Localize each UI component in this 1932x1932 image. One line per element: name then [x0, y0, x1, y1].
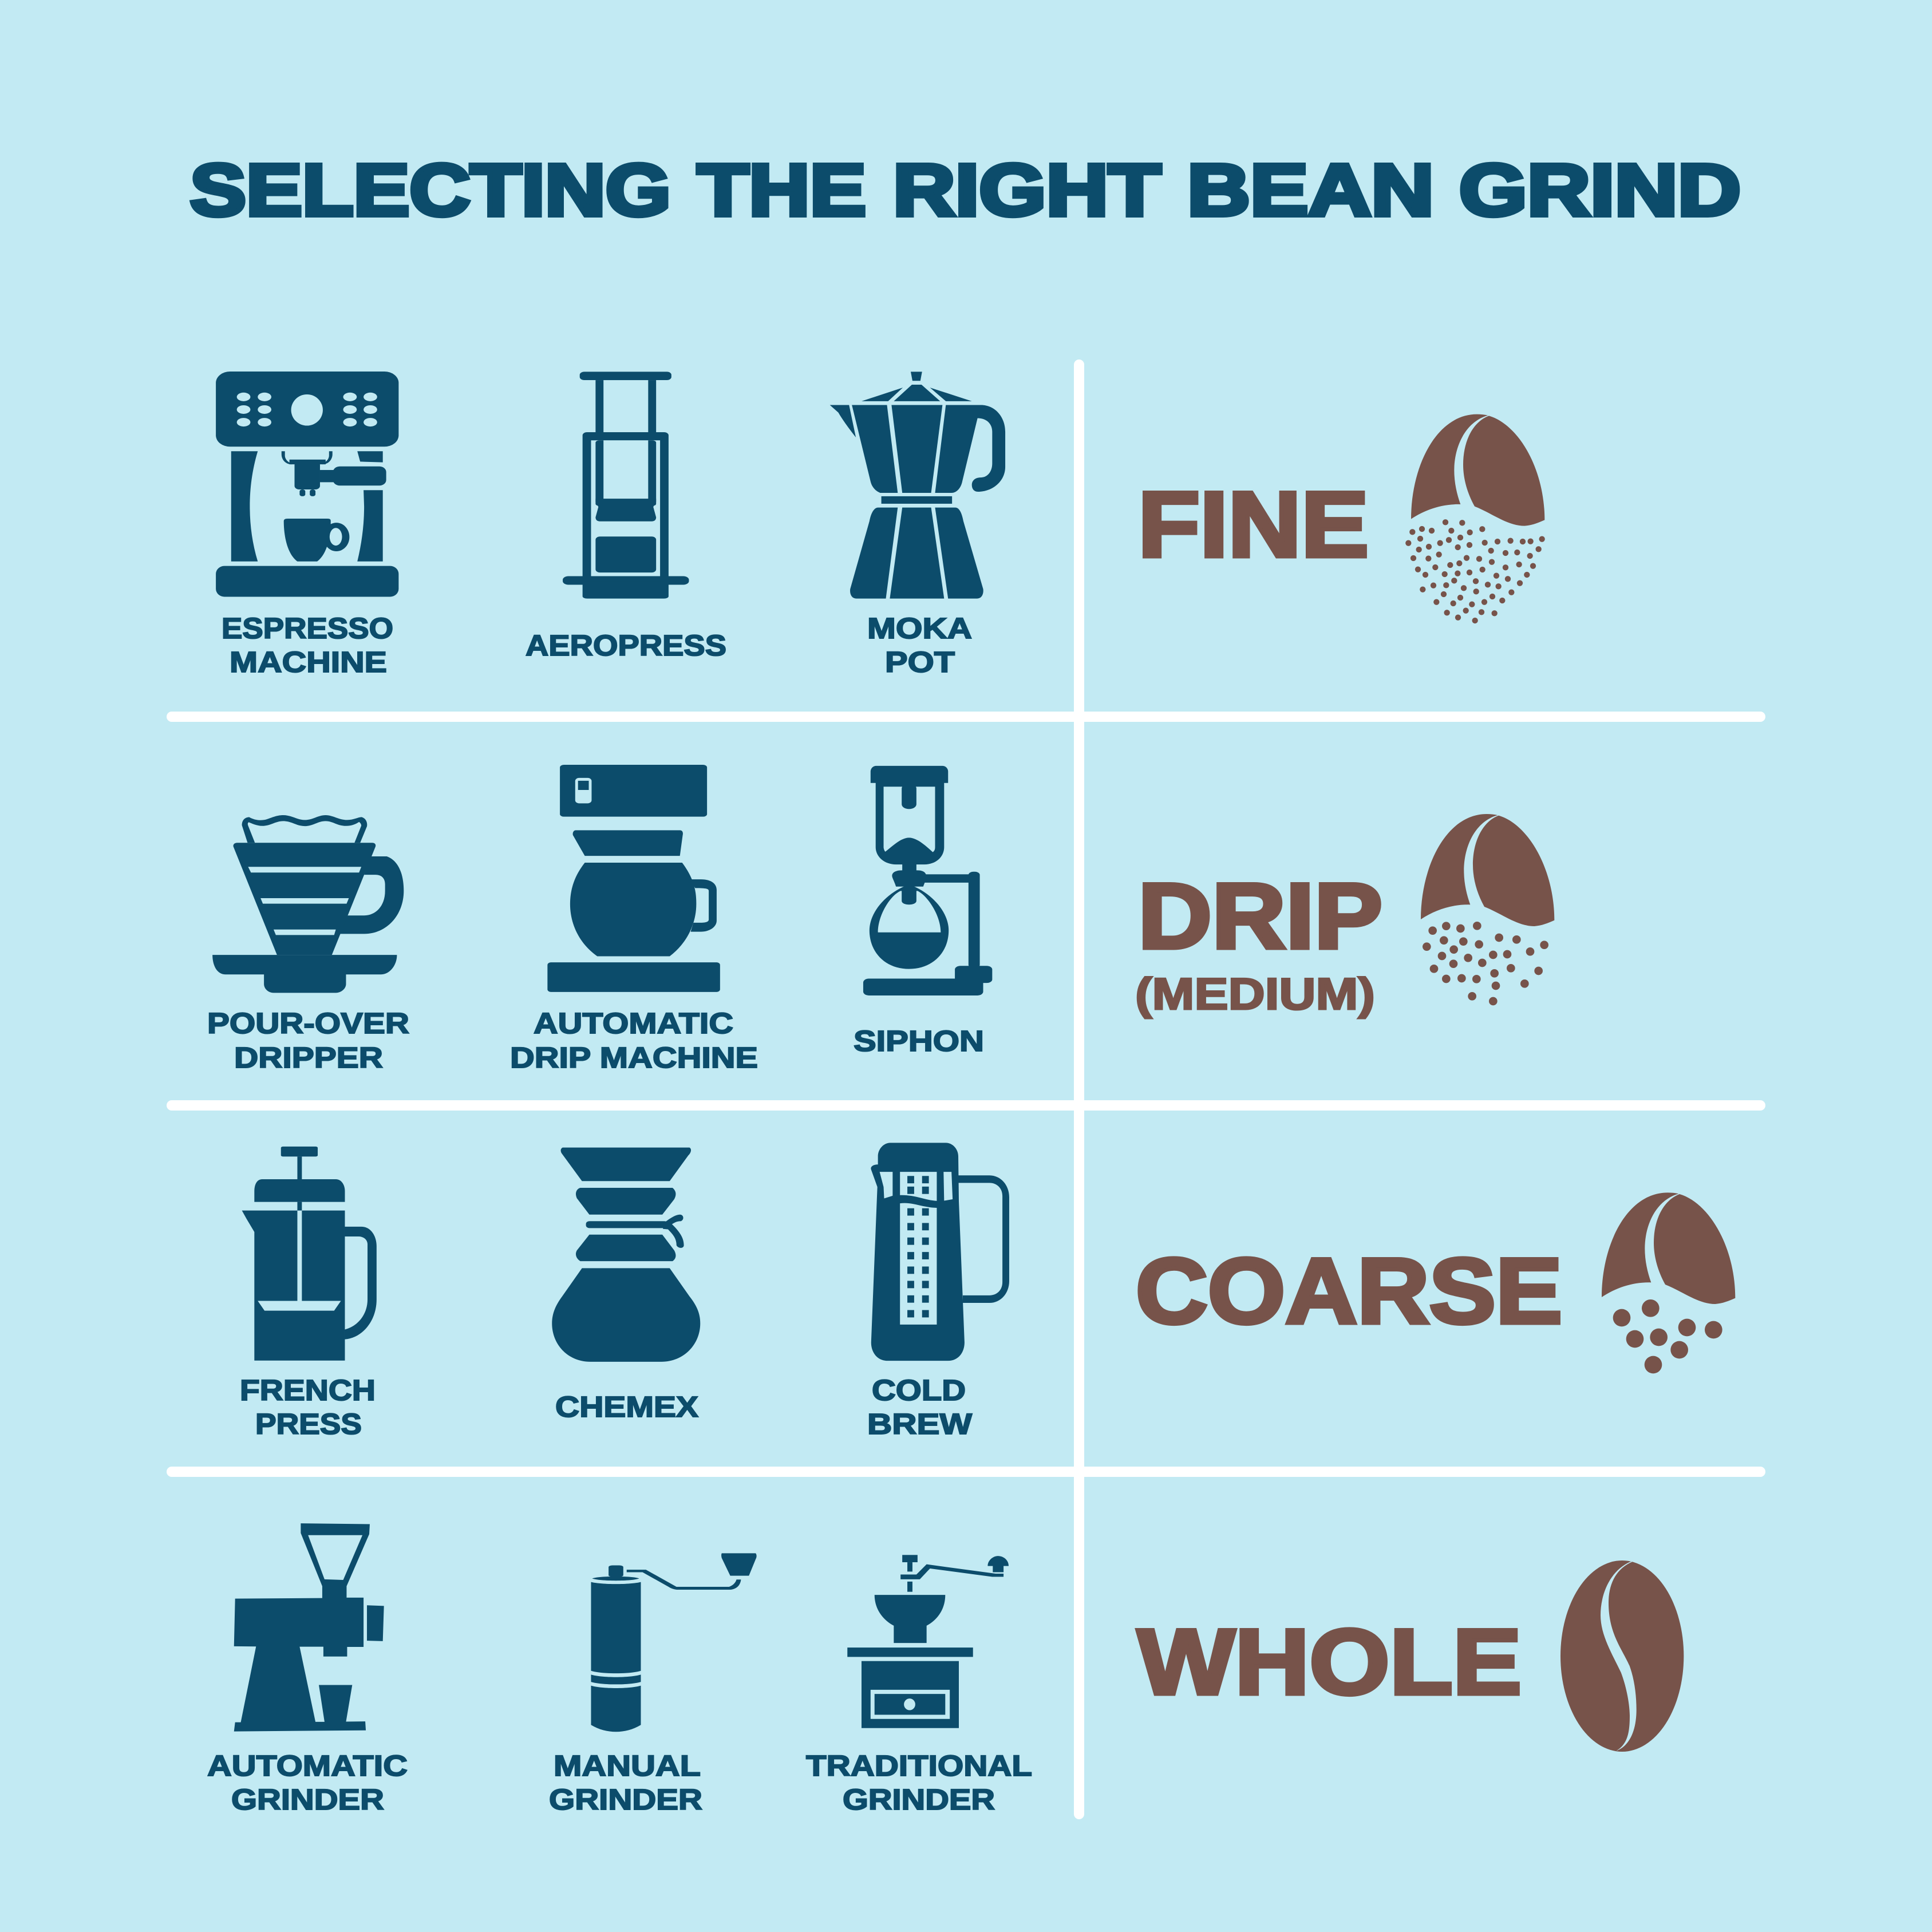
icon: automatic grinder — [234, 1523, 384, 1732]
title: GRIND — [1459, 149, 1741, 231]
item: cold brew — [867, 1143, 1009, 1440]
label: french press — [240, 1374, 376, 1440]
label: moka pot — [867, 612, 972, 678]
icon: espresso machine — [216, 372, 398, 596]
item: automatic grinder — [207, 1523, 408, 1816]
icon: cold brew — [871, 1143, 1009, 1361]
item: aeropress — [526, 372, 726, 662]
label: chemex: CHEMEX — [555, 1390, 698, 1423]
heading: coarse: COARSE — [1136, 1239, 1562, 1343]
label: french press: FRENCH — [240, 1374, 376, 1406]
item: pour-over dripper — [207, 815, 409, 1074]
icon: whole coffee bean — [1560, 1560, 1684, 1752]
title — [190, 149, 1741, 231]
panel: coarse grind — [1136, 1192, 1735, 1373]
title: BEAN — [1187, 149, 1434, 231]
label: espresso machine: MACHINE — [230, 646, 387, 678]
label: automatic grinder: AUTOMATIC — [207, 1749, 408, 1782]
subheading: medium: (MEDIUM) — [1135, 969, 1375, 1019]
icon: traditional grinder — [847, 1555, 1009, 1728]
row: coarse grind brewers — [240, 1143, 1009, 1440]
label: traditional grinder — [806, 1749, 1032, 1816]
label: traditional grinder: GRINDER — [843, 1783, 995, 1816]
heading: drip: DRIP — [1138, 864, 1382, 968]
panel: whole bean — [1137, 1560, 1684, 1752]
panel: drip grind — [1135, 814, 1554, 1019]
label: pour-over dripper: DRIPPER — [234, 1041, 383, 1074]
label: manual grinder: GRINDER — [549, 1783, 702, 1816]
row: fine grind brewers — [216, 372, 1005, 678]
label: cold brew — [867, 1374, 973, 1440]
label: aeropress: AEROPRESS — [526, 629, 726, 662]
icon: automatic drip machine — [547, 765, 720, 992]
heading: whole: WHOLE — [1137, 1610, 1522, 1714]
label: traditional grinder: TRADITIONAL — [806, 1749, 1032, 1782]
item: manual grinder — [549, 1553, 757, 1816]
label: automatic grinder: GRINDER — [231, 1783, 384, 1816]
icon: bean with medium grounds — [1421, 814, 1554, 1005]
icon: pour-over dripper — [212, 815, 404, 993]
row: drip grind brewers — [207, 765, 992, 1074]
label: moka pot: POT — [885, 646, 955, 678]
label: automatic grinder — [207, 1749, 408, 1816]
label: automatic drip machine: DRIP MACHINE — [510, 1041, 758, 1074]
icon: manual grinder — [591, 1553, 757, 1732]
label: espresso machine: ESPRESSO — [222, 612, 393, 645]
label: cold brew: COLD — [872, 1374, 966, 1406]
title: RIGHT — [893, 149, 1161, 231]
icon: siphon — [863, 766, 992, 995]
grid lines — [167, 359, 1765, 1819]
item: siphon — [854, 766, 992, 1057]
heading: fine: FINE — [1138, 473, 1369, 576]
icon: chemex — [552, 1148, 700, 1362]
icon: moka pot — [830, 372, 1005, 599]
label: pour-over dripper — [207, 1007, 409, 1074]
title: SELECTING — [190, 149, 671, 231]
label: automatic drip machine — [510, 1007, 758, 1074]
row: grinders — [207, 1523, 1032, 1816]
panel: fine grind — [1138, 414, 1545, 623]
label: french press: PRESS — [255, 1408, 362, 1440]
icon: bean with fine grounds — [1405, 414, 1545, 623]
label: automatic drip machine: AUTOMATIC — [534, 1007, 733, 1040]
item: chemex — [552, 1148, 700, 1423]
label: moka pot: MOKA — [867, 612, 972, 645]
icon: french press — [242, 1147, 377, 1361]
item: moka pot — [830, 372, 1005, 678]
label: manual grinder: MANUAL — [554, 1749, 701, 1782]
icon: aeropress — [563, 372, 689, 599]
label: pour-over dripper: POUR-OVER — [207, 1007, 409, 1040]
label: manual grinder — [549, 1749, 702, 1816]
item: espresso machine — [216, 372, 398, 678]
item: traditional grinder — [806, 1555, 1032, 1816]
label: siphon: SIPHON — [854, 1025, 984, 1057]
icon: bean with coarse grounds — [1602, 1192, 1735, 1373]
label: cold brew: BREW — [867, 1408, 973, 1440]
title: THE — [697, 149, 866, 231]
label: espresso machine — [222, 612, 393, 678]
item: automatic drip machine — [510, 765, 758, 1074]
item: french press — [240, 1147, 377, 1440]
